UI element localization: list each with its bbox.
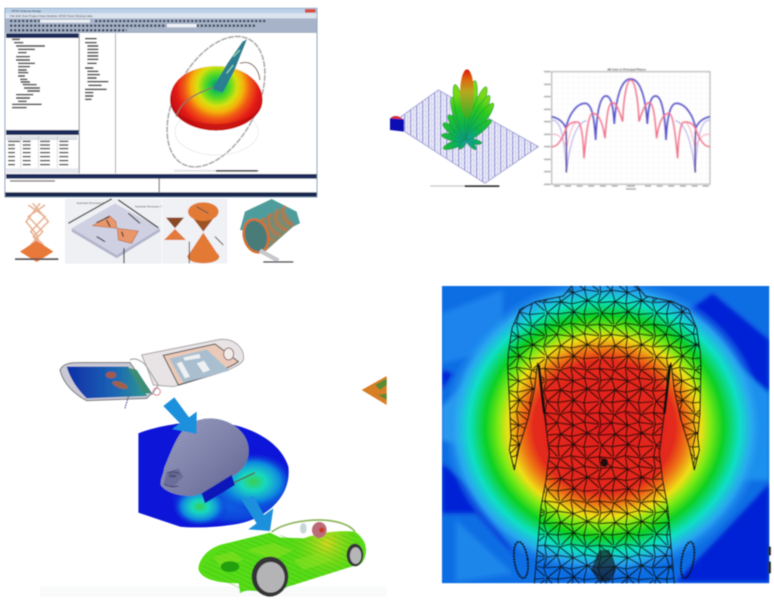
- array mesh: [392, 90, 538, 183]
- scale bar: [174, 170, 259, 172]
- scale bar: [430, 185, 500, 187]
- blue curve: [552, 79, 710, 140]
- edge marks: [766, 547, 773, 573]
- car occupant: [300, 522, 327, 538]
- chart title: dB Gain in Principal Planes: [607, 68, 646, 72]
- radiation lobes: [440, 80, 497, 152]
- icon: bowtie antenna on substrate: Substrate Dimension X: [77, 201, 104, 205]
- project tree panel: [6, 33, 80, 173]
- panel: phone, head and car simulation: [40, 339, 387, 597]
- field disc: [138, 422, 290, 528]
- navel: [601, 458, 608, 467]
- main lobe: [460, 69, 474, 119]
- field rings: [442, 286, 769, 583]
- groin mesh: [591, 550, 616, 582]
- patch antenna: [213, 39, 247, 93]
- icon: coil antenna: [240, 199, 300, 263]
- window frame: [5, 8, 317, 197]
- left hand: [512, 541, 530, 579]
- second tree panel: [85, 33, 116, 173]
- output panes: [5, 174, 317, 197]
- blue nulls: [566, 128, 696, 173]
- window toolbars: HFSS Antenna Design: [11, 9, 42, 13]
- icon: helical antenna: [15, 203, 58, 262]
- light curves: [552, 120, 710, 172]
- car model: [198, 520, 366, 593]
- window toolbars: [5, 9, 317, 33]
- arrow: head to car: [242, 496, 273, 531]
- polar plot ring: [147, 20, 285, 183]
- feed curves on pattern: [176, 62, 260, 117]
- car wheels: [252, 544, 363, 597]
- axis ticks: [544, 72, 709, 189]
- head model: [161, 418, 249, 496]
- field background: [442, 286, 769, 583]
- icon: bowtie antenna on substrate: Substrate Dimension Y: [135, 204, 162, 208]
- body wireframe: [506, 285, 772, 584]
- icon: bowtie antenna on substrate: [65, 199, 162, 264]
- panel: human body field map: [442, 286, 769, 583]
- 3D radiation pattern donut: [170, 66, 263, 131]
- properties table: [6, 130, 79, 173]
- feed block: [390, 116, 404, 132]
- icon: biconical antennas: [162, 199, 227, 264]
- red curve: [552, 80, 710, 158]
- chart grid: [552, 72, 710, 184]
- phone near head: [202, 473, 255, 503]
- armpit shadow: [539, 365, 670, 413]
- window toolbars: File Edit View Project Draw Modeler HFSS Tools Window Help: [10, 14, 93, 18]
- faint floor band: [40, 587, 387, 597]
- panel: software window with radiation pattern: [5, 8, 317, 197]
- flip phone model: [60, 339, 244, 408]
- panel: phased array with far-field lobes: [390, 69, 538, 187]
- arrow: phone to head: [163, 397, 197, 434]
- panel: principal plane gain chart: [544, 68, 710, 189]
- antenna icon row: [15, 199, 300, 264]
- PCB fragment: [362, 376, 387, 405]
- right hand: [679, 541, 697, 579]
